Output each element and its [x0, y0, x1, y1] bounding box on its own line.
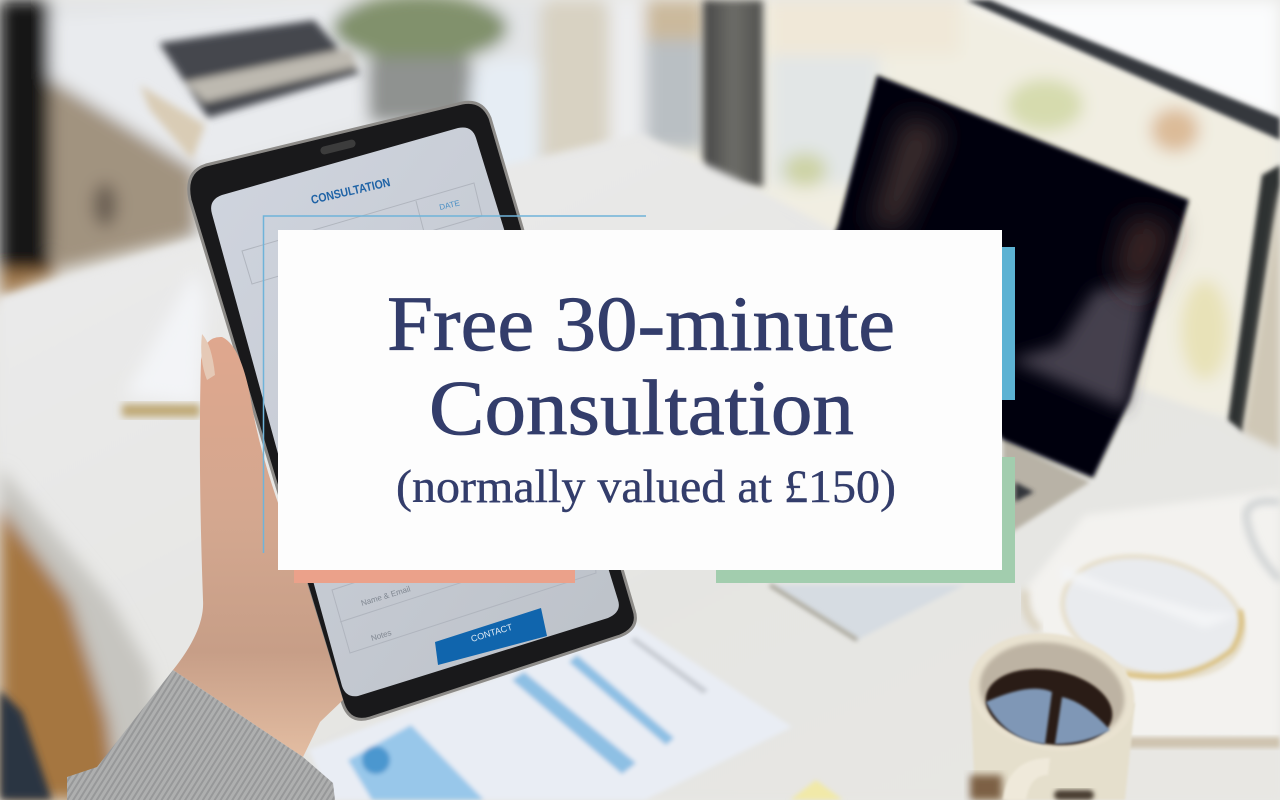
- tablet body: [189, 102, 635, 719]
- screen form labels: Notes: [370, 628, 393, 643]
- tray with saucer and spoon: [1025, 490, 1280, 748]
- sub-line: (normally valued at £150): [396, 461, 896, 513]
- screen small label: DATE: [438, 199, 461, 212]
- spoon: [1060, 566, 1240, 628]
- window frame: [966, 0, 1280, 140]
- screen form labels: [360, 584, 412, 643]
- white offer card: [278, 230, 1002, 570]
- paper gold edge: [122, 404, 200, 417]
- coffee cup: [960, 620, 1144, 800]
- screen form fields: [242, 183, 596, 653]
- hand holding tablet: [67, 334, 343, 800]
- dark chair corner: [0, 690, 52, 800]
- screen heading: CONSULTATION: [310, 175, 392, 207]
- sweater sleeve: [67, 670, 335, 800]
- glasses: [1246, 501, 1280, 580]
- saucer gold rim: [1125, 610, 1241, 677]
- back room left: [0, 0, 640, 240]
- cup rim: [960, 620, 1144, 764]
- laptop base: [770, 585, 964, 640]
- cup logo: [1054, 790, 1094, 800]
- headline line 2: Consultation: [429, 364, 854, 451]
- tablet screen: [211, 127, 619, 696]
- speaker: [320, 139, 356, 155]
- wood floor: [0, 467, 165, 800]
- laptop: [770, 75, 1189, 640]
- tablet showing consultation form: [189, 102, 635, 719]
- headline line 1: Free 30-minute: [387, 280, 895, 367]
- thin blue frame line: [264, 216, 646, 553]
- saucer: [1050, 538, 1256, 696]
- laptop screen: [832, 75, 1189, 478]
- screen contact button: [435, 608, 547, 665]
- accent bar: green corner: [716, 457, 1015, 583]
- cup body: [970, 680, 1135, 800]
- screen contact button: CONTACT: [470, 622, 514, 644]
- coffee: [980, 659, 1118, 755]
- screen form labels: Name & Email: [360, 584, 412, 608]
- paper under hand: [125, 270, 205, 405]
- accent bar: blue right: [1002, 247, 1015, 400]
- pillar: [703, 0, 763, 187]
- fingernail: [201, 334, 215, 380]
- window view: [640, 0, 1280, 420]
- accent bar: salmon bottom: [294, 570, 575, 583]
- paper document on desk: [309, 623, 843, 800]
- books: [140, 20, 360, 160]
- coffee reflection: [986, 689, 1052, 744]
- cup handle: [1003, 758, 1050, 800]
